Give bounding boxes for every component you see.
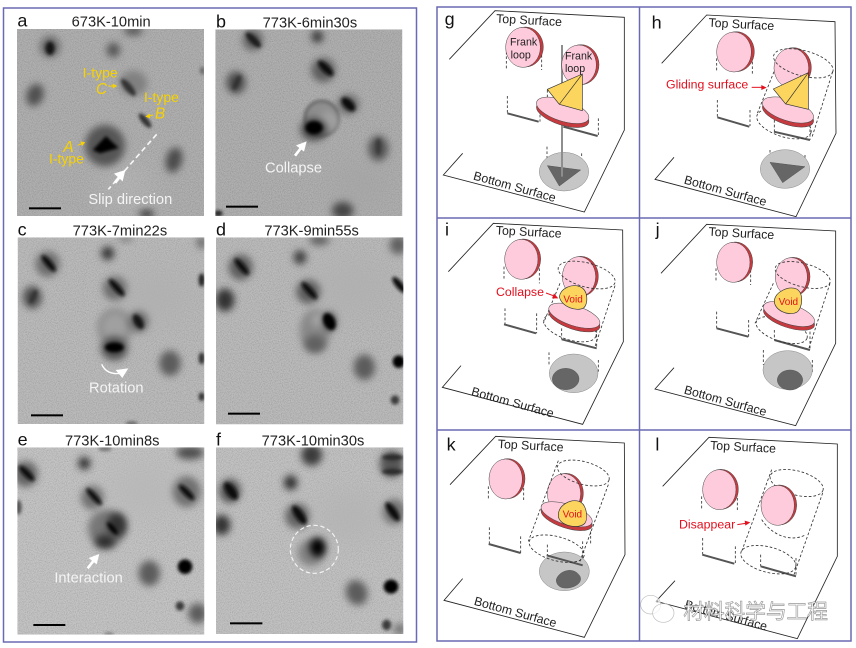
scale bar b [226,206,258,208]
dashed cylinder [738,464,826,579]
frank loop right [547,473,583,514]
label: top surface: Top Surface [710,438,776,456]
surface frame [444,436,625,637]
label: bottom surface: Bottom Surface [473,594,558,630]
frame: right schematic panel [437,7,851,641]
surface frame [443,11,624,212]
label f: f [216,429,222,449]
label: collapse: Collapse [496,285,544,299]
label: rotation: Rotation [89,381,144,397]
scale bar e [33,624,65,626]
title e: 773K-10min8s [65,433,160,449]
traces [489,544,583,565]
label: top surface: Top Surface [708,225,775,242]
frame: left micrograph panel [4,8,416,642]
label: gliding surface: Gliding surface [666,78,748,92]
wechat icon watermark [641,595,674,622]
scale bar f [230,622,262,624]
panel: l [641,435,837,639]
frank loop right: loop [565,63,585,75]
panel: e [14,429,207,636]
frank loop left [703,469,738,510]
panel: f [213,429,406,635]
micrograph c [18,235,206,425]
title f: 773K-10min30s [262,433,364,449]
label: bottom surface: Bottom Surface [472,169,558,205]
interaction arrow [88,554,99,568]
label k: k [447,435,457,455]
surface frame [442,223,623,424]
title b: 773K-6min30s [263,15,357,31]
label: top surface: Top Surface [496,12,562,29]
label: I-type C: C [96,81,108,98]
frank loop right [562,45,599,85]
frank loop left [489,459,525,499]
void: Void [779,297,798,308]
scale bar d [228,413,260,415]
dashed cylinder [753,43,836,145]
label: top surface: Top Surface [496,223,562,241]
dashed cylinder [526,455,612,568]
frank loop left [717,32,754,72]
dashed cylinder [753,256,833,350]
dashed guides and traces [504,267,598,372]
inclined loop disk [538,497,595,536]
micrograph f [213,444,406,635]
label a: a [17,11,27,31]
slip direction arrow [108,134,157,189]
label l: l [655,435,659,455]
void [559,286,587,309]
yellow tetrahedron [547,74,582,111]
title c: 773K-7min22s [73,223,167,239]
frank loop right [774,48,811,88]
label: bottom surface: Bottom Surface [683,383,768,419]
panel: k [444,435,625,637]
label: I-type A: A [62,139,74,156]
panel: a [17,11,205,218]
label d: d [216,219,226,239]
label: bottom surface: Bottom Surface [683,173,768,209]
dashed guides and traces [488,486,591,565]
label: top surface: Top Surface [498,437,564,454]
label: I-type A: I-type [49,151,84,167]
panel: b [214,11,402,219]
bottom gray disk [549,354,598,393]
collapse arrow [295,141,307,156]
label: collapse: Collapse [265,161,322,177]
dislocation rod [559,45,565,177]
inclined loop disk [533,92,592,133]
label: I-type B [144,89,179,122]
panel: h [652,12,836,217]
label i: i [445,220,449,240]
label j: j [655,220,660,240]
panel: g [443,9,624,212]
panel: i [442,220,623,424]
yellow tetrahedron [773,73,808,109]
frank loop right [562,256,598,297]
dashed guides and traces [716,268,812,373]
title a: 673K-10min [72,15,151,31]
label: I-type B: I-type [144,89,179,105]
micrograph a [17,26,205,218]
label: bottom surface: Bottom Surface [470,384,556,421]
surface frame [655,224,836,426]
label: interaction: Interaction [54,571,123,587]
surface frame [656,437,837,639]
frank loop right: Frank [565,50,593,62]
bottom gray disk [760,150,810,188]
inclined loop disk [761,296,817,335]
void [558,501,587,526]
scale bar a [29,207,61,209]
frank loop left: Frank [510,36,538,48]
bottom gray disk [763,351,812,390]
frank loop left [505,239,541,279]
frank loop right [775,257,810,296]
panel: c [18,219,206,425]
frank loop left [506,27,543,67]
dashed guides and traces [702,496,796,576]
void: Void [563,509,582,520]
label g: g [445,9,455,29]
micrograph e [14,446,207,636]
void: Void [563,294,583,305]
frank loop right [761,485,797,525]
micrograph b [214,29,402,219]
dashed cylinder [540,256,618,348]
label: disappear: Disappear [679,517,735,531]
rotation arrow [102,364,128,378]
label: slip direction: Slip direction [88,192,172,208]
surface frame [655,15,836,217]
panel: j [655,220,836,426]
label: bottom surface: Bottom Surface [683,597,769,634]
label h: h [652,12,662,32]
bottom gray disk [539,552,589,591]
label: top surface: Top Surface [708,16,775,33]
watermark text: 材料科学与工程 [683,601,828,624]
panel: d [216,219,409,424]
scale bar c [31,414,63,416]
label: I-type C: I-type [83,64,118,80]
title d: 773K-9min55s [264,223,359,239]
label: I-type C [83,64,118,98]
label: I-type A [49,139,85,167]
dashed circle [290,525,338,573]
bottom gray disk [539,152,589,191]
dashed guides and traces [506,52,598,170]
frank loop left: loop [511,49,531,61]
label c: c [18,219,27,239]
frank loop left [717,242,753,282]
inclined loop disk [759,92,817,132]
micrograph d [216,235,409,424]
label: I-type B: B [155,105,165,122]
dashed guides and traces [717,58,810,167]
label b: b [216,11,226,31]
void [774,288,802,314]
inclined loop disk [546,298,603,337]
label e: e [18,429,28,449]
